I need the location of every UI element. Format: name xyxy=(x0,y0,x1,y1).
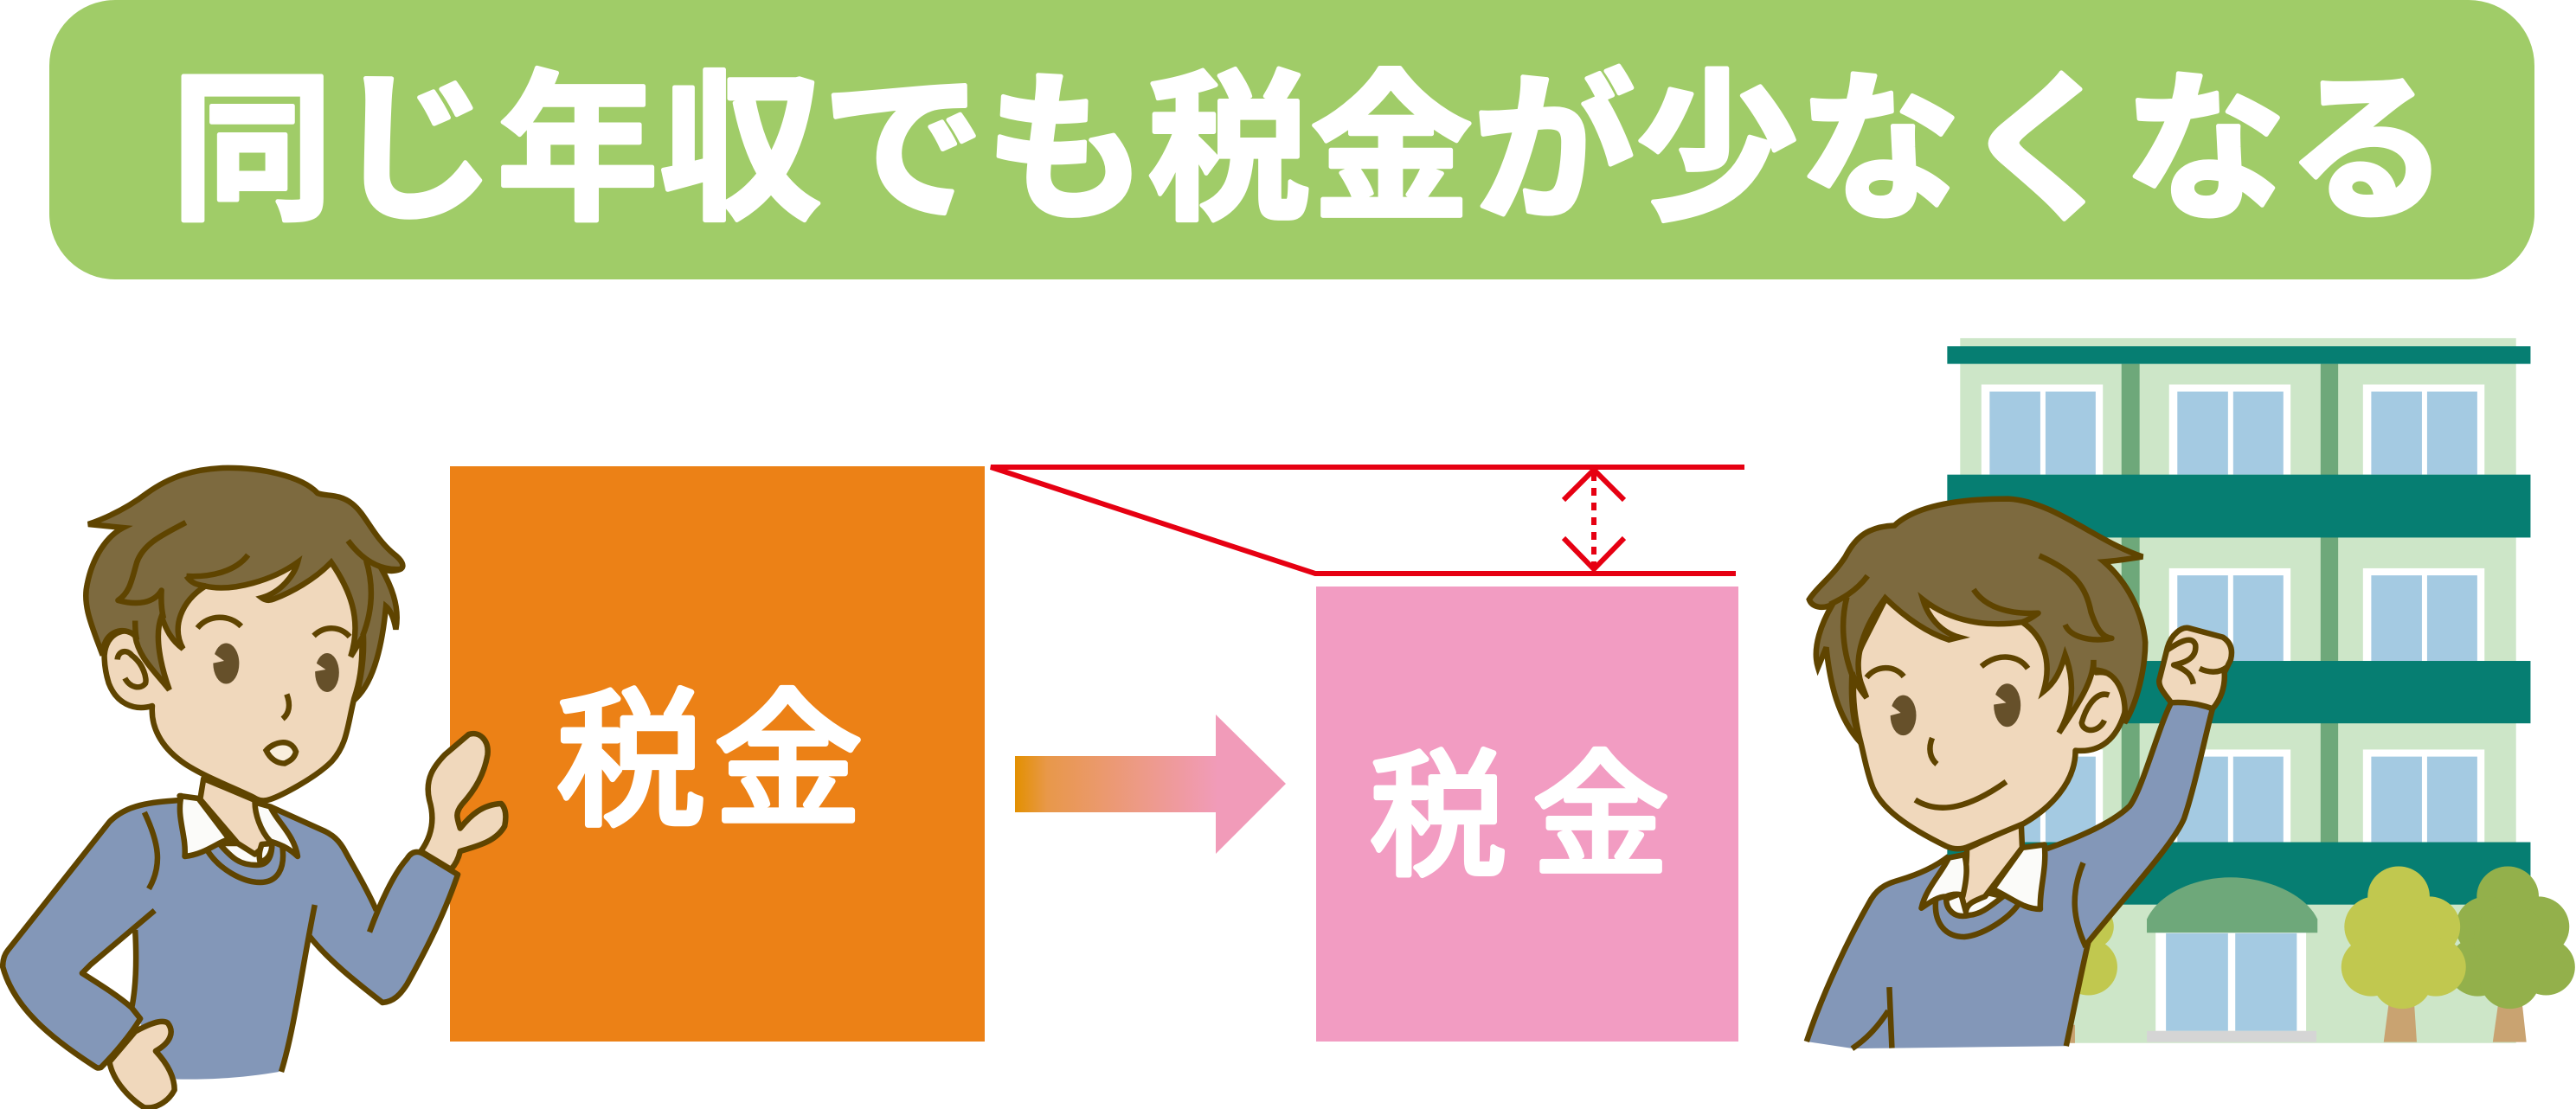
eyebrows xyxy=(197,618,350,637)
title banner xyxy=(49,0,2534,279)
label: tax after: 税金 xyxy=(1370,741,1669,894)
nose xyxy=(1930,738,1937,764)
tree: right light xyxy=(2448,866,2575,1042)
hair xyxy=(1809,499,2145,743)
building with trees xyxy=(1947,338,2575,1043)
hair strands xyxy=(118,522,401,640)
person: man with raised fist, right xyxy=(1807,499,2232,1048)
eyebrows xyxy=(1866,657,2028,677)
eyes xyxy=(211,644,339,692)
reduction guide lines xyxy=(991,467,1744,574)
hair strands xyxy=(1830,555,2111,677)
eyes xyxy=(1889,683,2020,735)
arrow: gradient orange to pink xyxy=(1015,715,1286,854)
right hand xyxy=(421,734,505,869)
fist xyxy=(2159,628,2232,708)
nose xyxy=(283,694,289,719)
entrance door xyxy=(2147,877,2317,1042)
hair xyxy=(86,468,402,699)
tree behind person xyxy=(2059,905,2117,1043)
collar and neck xyxy=(1921,824,2045,937)
panel: pink tax block (after) xyxy=(1316,587,1738,1042)
collar and neck xyxy=(180,779,298,882)
label: tax before: 税金 xyxy=(556,679,863,845)
face xyxy=(1853,599,2125,849)
ear xyxy=(2082,695,2109,730)
double arrow: tax reduction xyxy=(1564,470,1624,569)
person: man pointing, left xyxy=(3,468,505,1107)
title text: 同じ年収でも税金が少なくなる xyxy=(171,60,2449,240)
left hand xyxy=(110,1022,175,1107)
face xyxy=(105,562,362,800)
ear xyxy=(118,651,146,687)
mouth xyxy=(267,742,296,763)
panel: orange tax block (before) xyxy=(450,466,985,1042)
tree: centre lime xyxy=(2342,866,2466,1042)
sweater xyxy=(1807,702,2213,1048)
smile xyxy=(1915,782,2006,808)
sweater xyxy=(3,800,458,1080)
